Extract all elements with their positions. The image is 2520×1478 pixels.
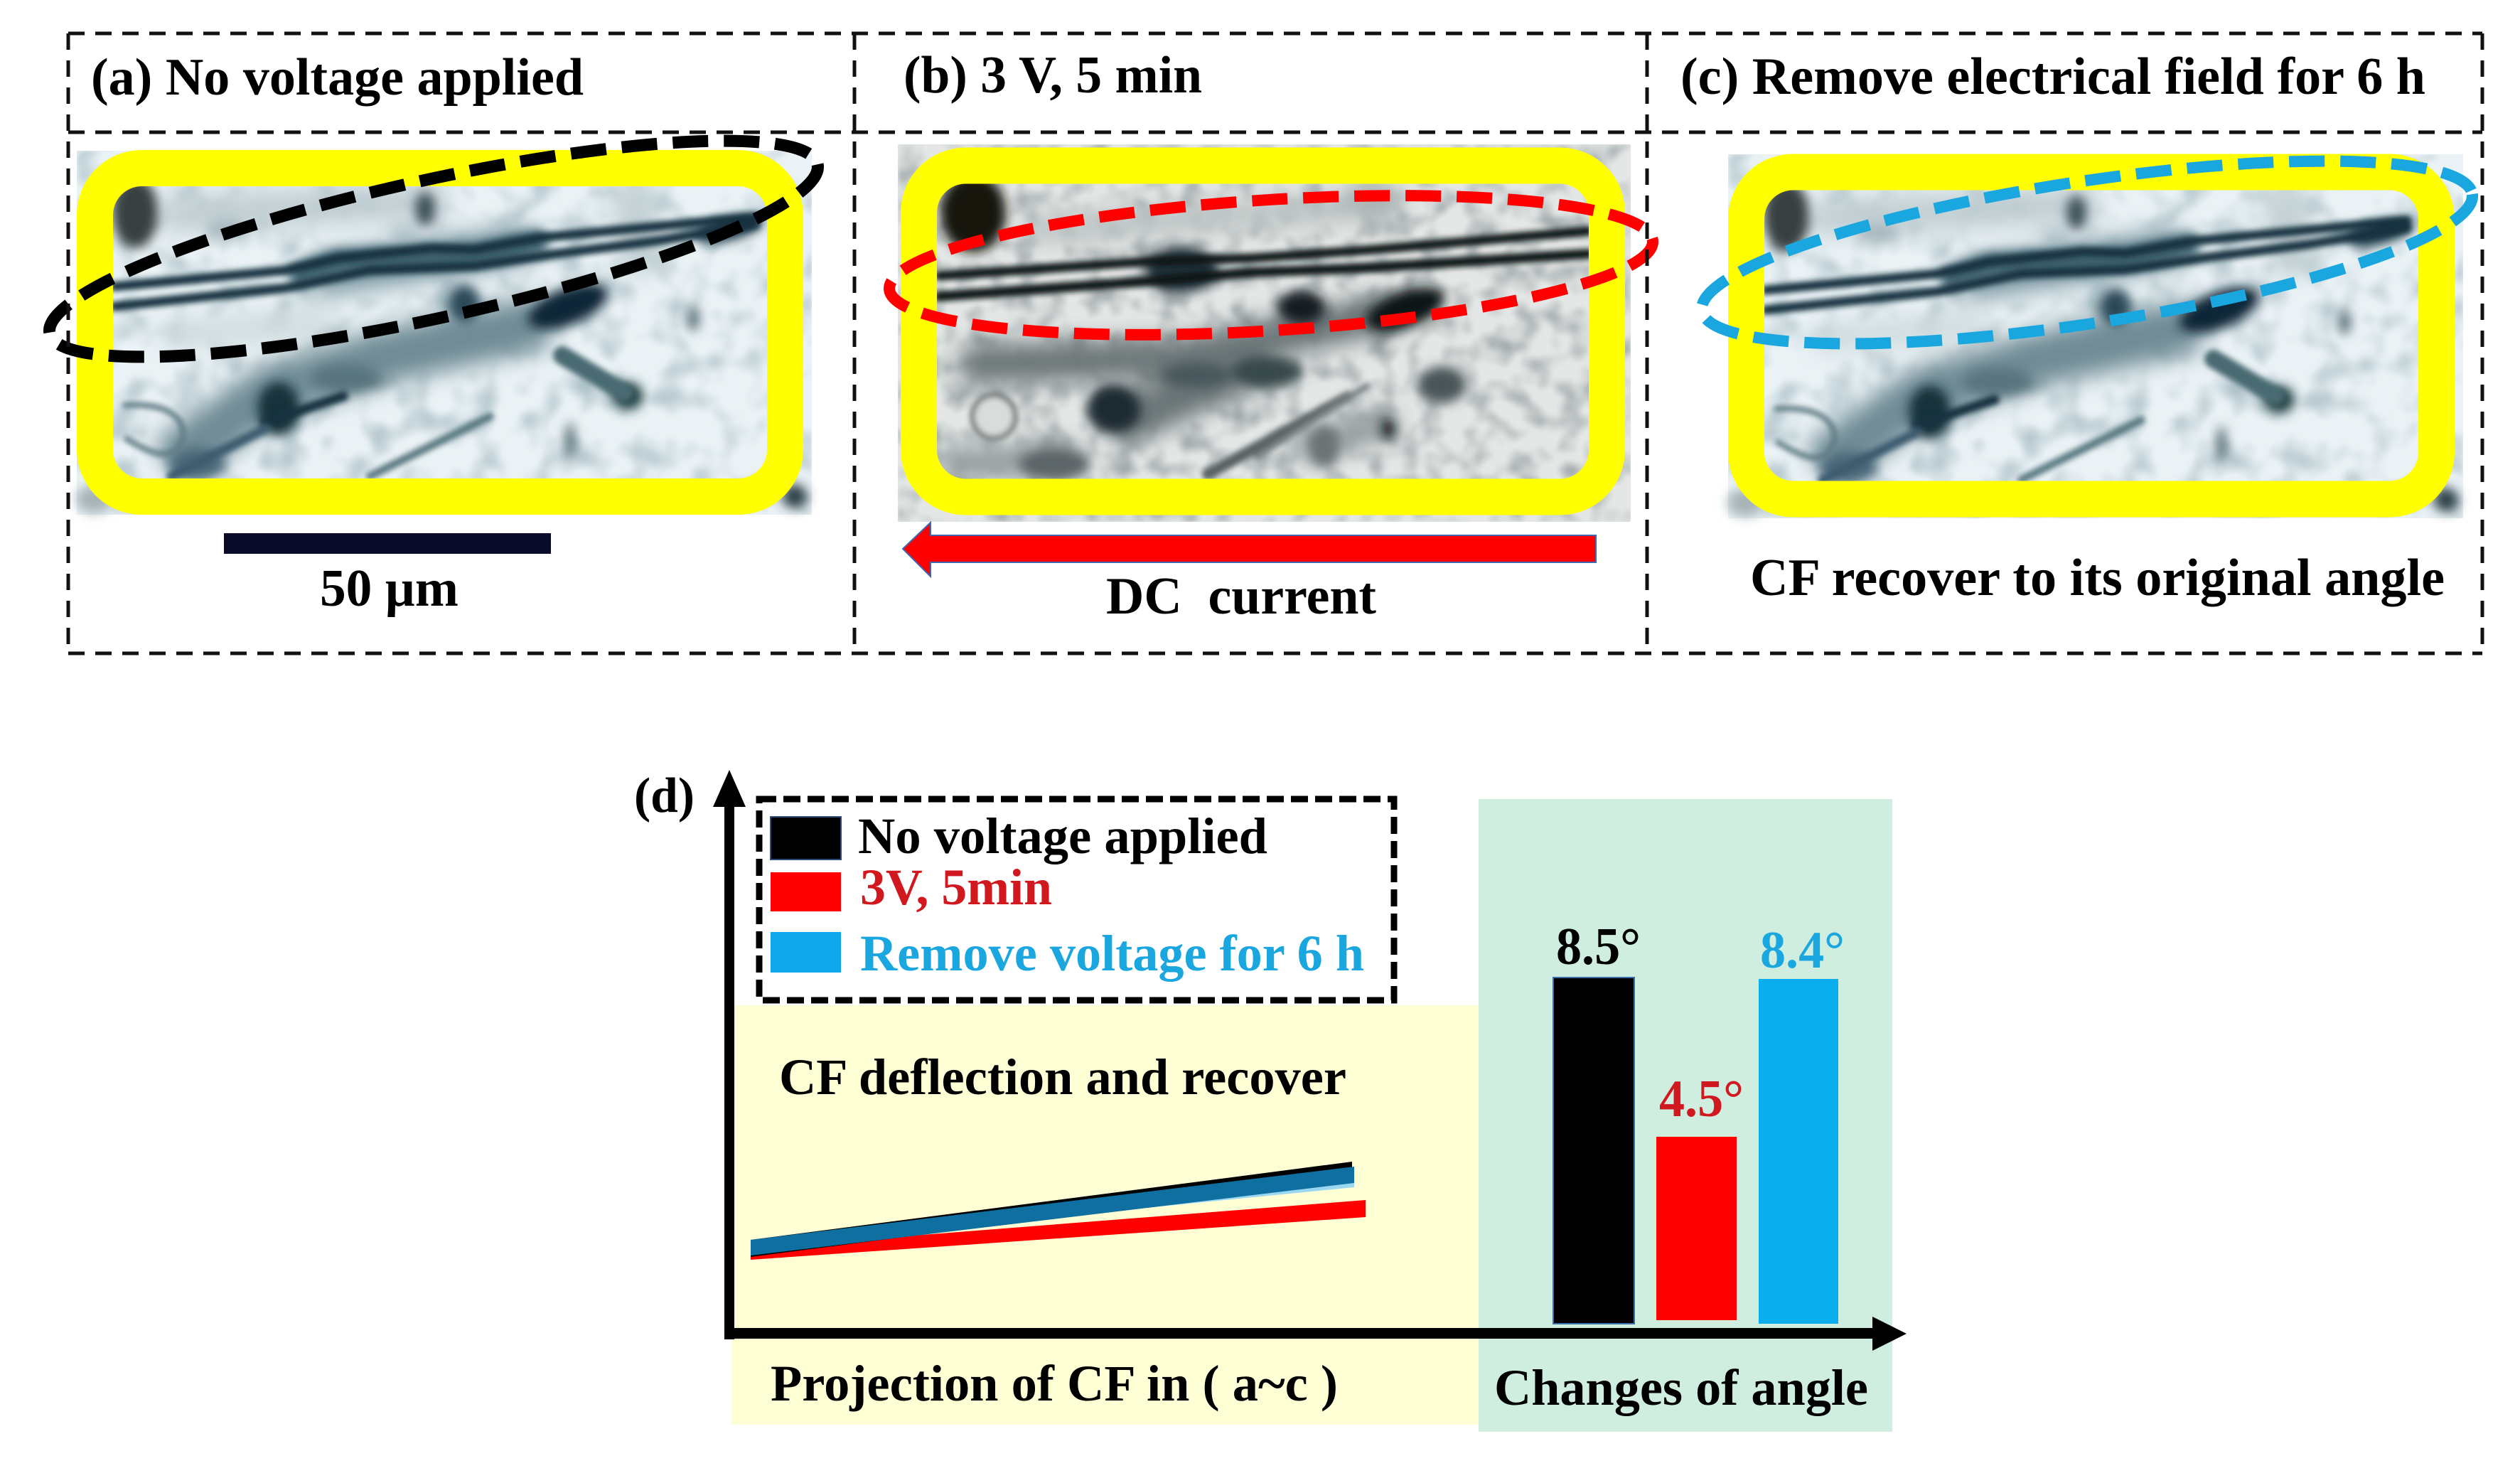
x axis arrow	[724, 1317, 1907, 1351]
scale label: 50 µm	[320, 559, 459, 618]
y axis arrow	[713, 770, 746, 1339]
panel: (c) remove electrical field	[1680, 48, 2483, 607]
value: 4.5: 4.5°	[1659, 1070, 1744, 1128]
yellow rounded frame (c)	[1746, 172, 2437, 499]
panel: (b) 3 V, 5 min	[885, 46, 1657, 626]
microscope image (c)	[1727, 154, 2463, 518]
heading (b): (b) 3 V, 5 min	[904, 46, 1202, 105]
label (d): (d)	[634, 769, 695, 823]
red dashed ellipse around fibre (b)	[885, 176, 1657, 355]
blue dashed ellipse around fibre (c)	[1691, 124, 2483, 381]
bar: 8.4 degrees	[1759, 979, 1838, 1324]
fibre projection lines	[751, 1162, 1366, 1260]
legend swatch: black	[771, 817, 841, 860]
scale bar	[224, 533, 551, 554]
legend label: no voltage: No voltage applied	[858, 808, 1267, 864]
legend	[759, 799, 1394, 1000]
arrow: DC current direction	[903, 523, 1596, 577]
panel: (d) deflection chart	[634, 769, 1907, 1432]
panel: (a) no voltage applied	[35, 48, 832, 618]
background: projection area	[731, 1005, 1479, 1425]
value: 8.4: 8.4°	[1760, 921, 1845, 980]
DC current label: DC current	[1106, 567, 1376, 626]
microscope image (a)	[76, 151, 812, 515]
legend label: 3V, 5min: 3V, 5min	[860, 859, 1052, 916]
legend label: remove voltage: Remove voltage for 6 h	[860, 925, 1364, 982]
bar: 4.5 degrees	[1656, 1137, 1737, 1320]
heading: CF deflection and recover: CF deflection and recover	[779, 1049, 1346, 1105]
heading (c): (c) Remove electrical field for 6 h	[1680, 48, 2425, 106]
axis label: changes of angle: Changes of angle	[1494, 1359, 1868, 1416]
legend swatch: blue	[771, 932, 841, 973]
caption (c): CF recover to its original angle	[1750, 549, 2445, 607]
microscope image (b)	[898, 144, 1631, 522]
legend swatch: red	[771, 872, 841, 911]
value: 8.5: 8.5°	[1556, 918, 1641, 976]
yellow rounded frame (b)	[918, 166, 1607, 497]
axis label: projection: Projection of CF in ( a~c )	[771, 1355, 1338, 1412]
black dashed ellipse around fibre (a)	[35, 97, 832, 400]
heading (a): (a) No voltage applied	[91, 48, 584, 107]
bar: 8.5 degrees	[1553, 978, 1634, 1324]
yellow rounded frame (a)	[95, 168, 785, 496]
background: changes of angle area	[1479, 799, 1892, 1432]
